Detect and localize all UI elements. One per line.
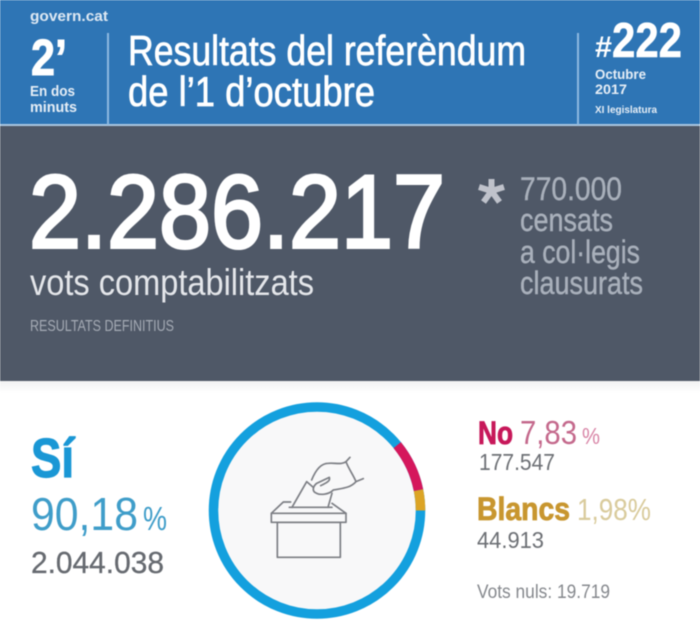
votes label: vots comptabilitzats: [30, 262, 314, 303]
closed polling stations note: censats: [520, 202, 613, 238]
badge: 2 minutes: minuts: [30, 99, 77, 116]
closed polling stations note: 770.000: [520, 171, 622, 207]
result: blank: [477, 491, 651, 553]
closed polling stations note: clausurats: [520, 265, 643, 301]
issue number and date: XI legislatura: [595, 104, 657, 116]
result: no: 7,83: [520, 414, 577, 451]
result: blank: 1,98%: [577, 492, 651, 527]
issue number and date: Octubre: [595, 66, 646, 82]
title: Resultats del referèndum: [128, 27, 526, 74]
segment: no: [397, 445, 418, 490]
title: de l’1 d’octubre: [128, 68, 375, 115]
result: yes: [31, 427, 167, 580]
result: blank: 44.913: [477, 527, 544, 553]
title: [128, 27, 526, 115]
icon: ballot box: [271, 457, 363, 557]
badge: 2 minutes: [30, 29, 77, 116]
result: no: %: [582, 423, 600, 449]
result: yes: %: [143, 500, 167, 537]
result: blank: Blancs: [477, 491, 570, 527]
issue number and date: 222: [612, 14, 682, 68]
total number: 2.286.217: [29, 154, 445, 270]
issue number and date: [595, 14, 682, 116]
panel: header: [0, 0, 700, 126]
brand: govern.cat: govern.cat: [30, 9, 108, 25]
definitive results note: RESULTATS DEFINITIUS: [30, 318, 174, 335]
closed polling stations note: a col·legis: [520, 234, 640, 270]
issue number and date: 2017: [595, 81, 627, 97]
result: yes: Sí: [31, 427, 75, 489]
result: yes: 90,18: [31, 488, 138, 540]
icon: asterisk: [479, 179, 504, 202]
badge: 2 minutes: 2’: [31, 29, 67, 86]
result: no: [478, 414, 600, 475]
issue number and date: #: [595, 31, 612, 64]
badge: 2 minutes: En dos: [30, 83, 75, 100]
chart: results ring: [214, 407, 421, 614]
segment: blank: [418, 490, 421, 510]
result: no: No: [478, 415, 513, 451]
null votes: Vots nuls: 19.719: [477, 582, 610, 603]
result: yes: 2.044.038: [31, 545, 164, 580]
panel: total votes: [0, 126, 700, 381]
closed polling stations note: [520, 171, 643, 301]
result: no: 177.547: [479, 449, 555, 475]
